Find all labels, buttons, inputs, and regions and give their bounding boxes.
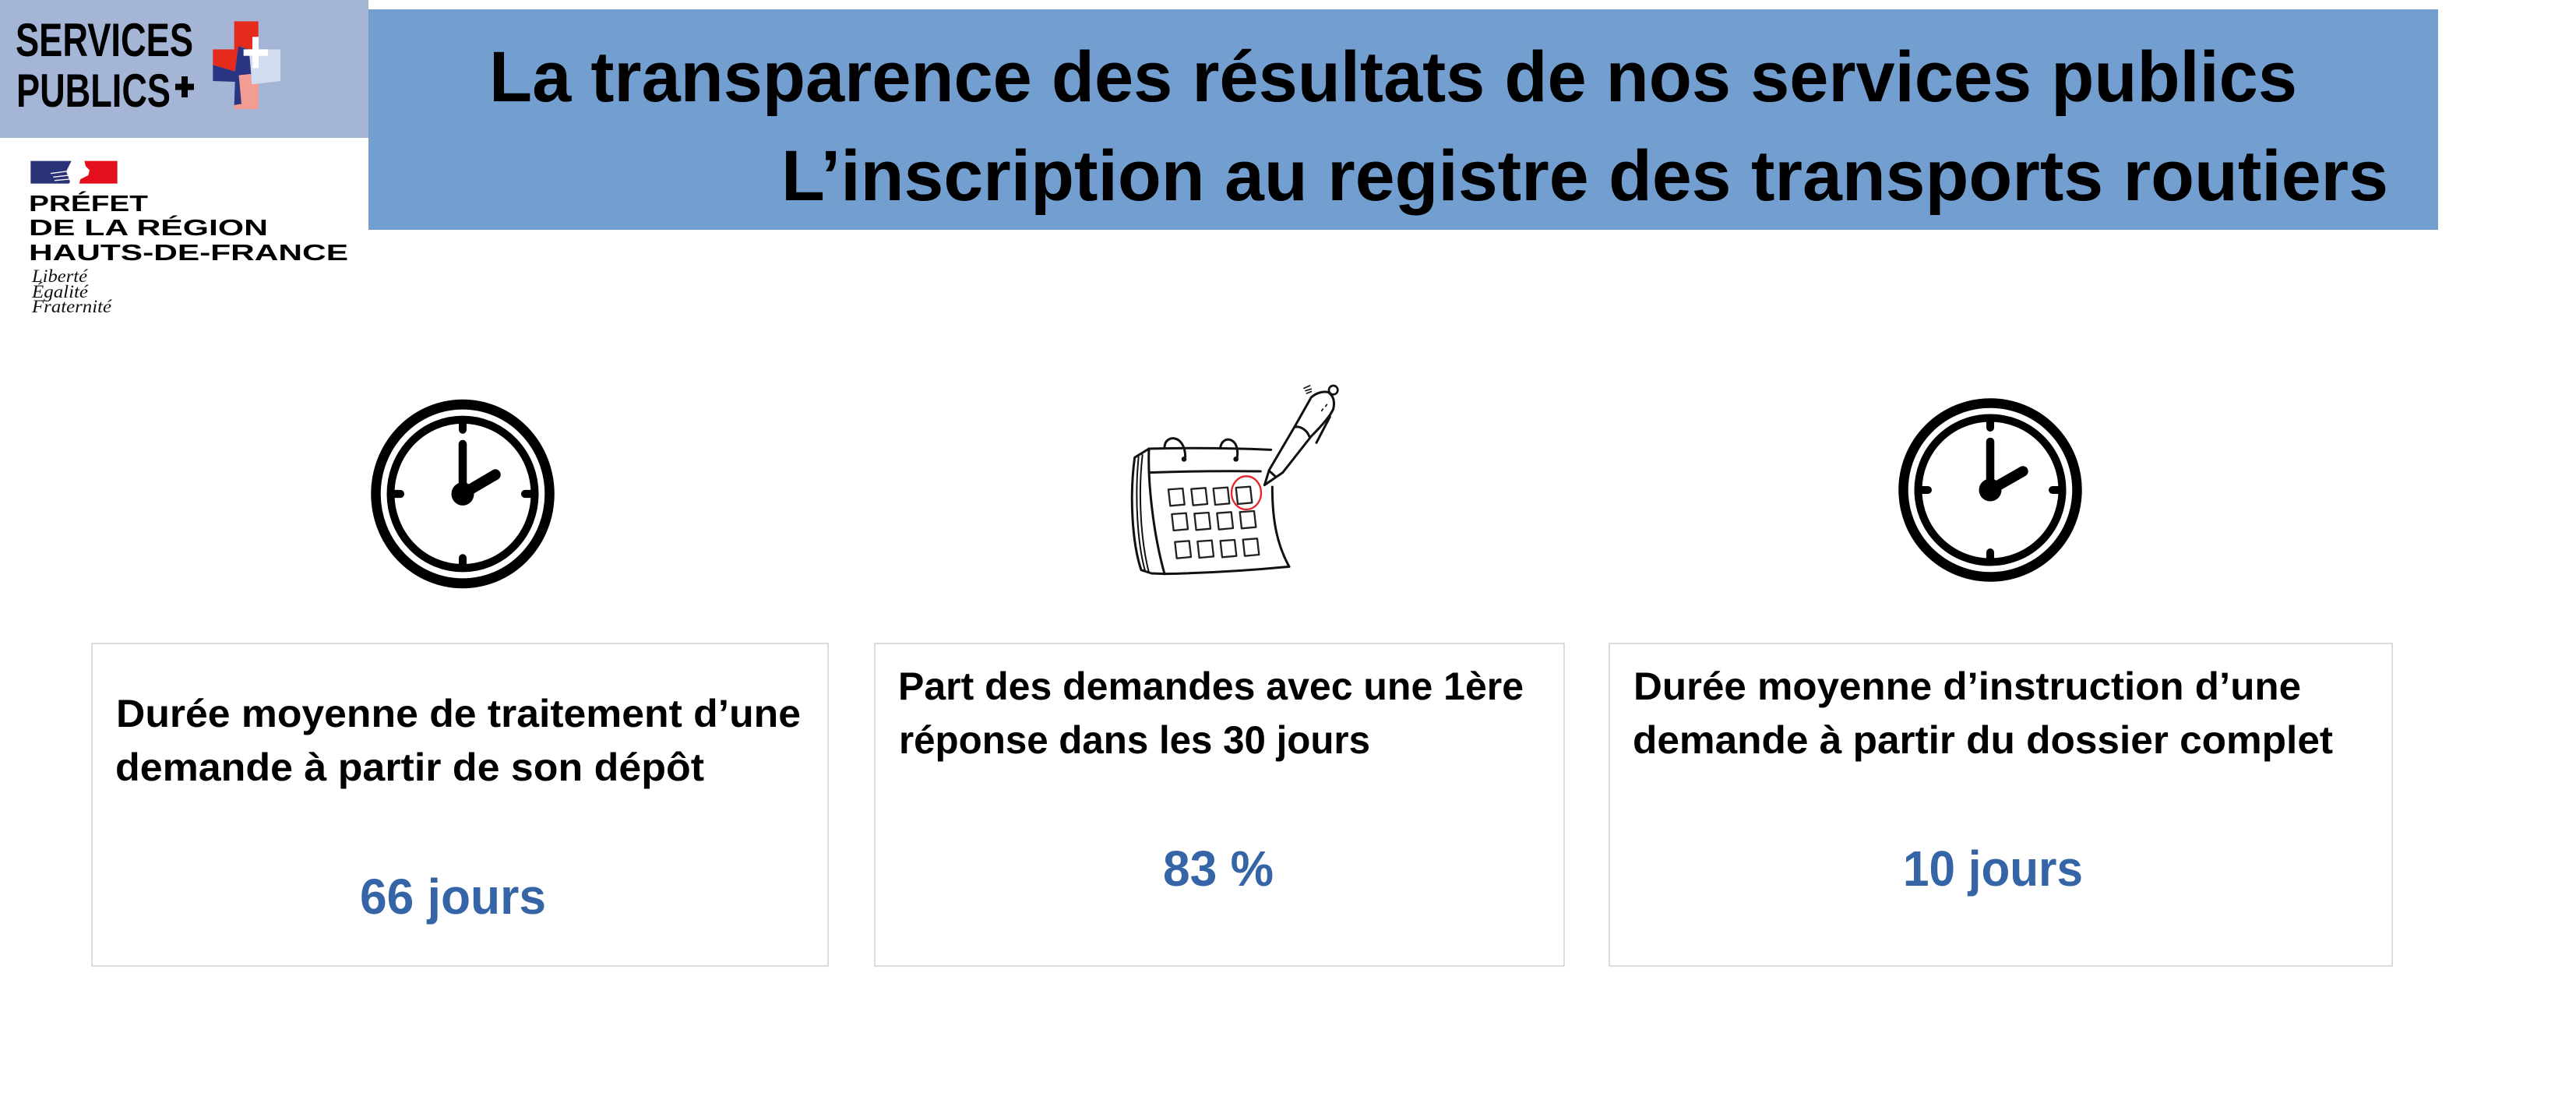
logo: Préfet de la région Hauts-de-France: PRÉFET xyxy=(29,190,148,217)
logo: Préfet de la région Hauts-de-France: HAUTS-DE-FRANCE xyxy=(29,241,348,266)
label: durée d'instruction xyxy=(1633,665,2333,762)
value: 83 %: 83 % xyxy=(1163,841,1274,897)
label: durée de traitement: Durée moyenne de traitement d’une xyxy=(116,692,801,735)
value: 66 jours: 66 jours xyxy=(360,869,546,925)
title banner: L’inscription au registre des transports routiers xyxy=(781,136,2388,216)
logo: Services Publics+ xyxy=(0,0,368,138)
logo: Préfet de la région Hauts-de-France: DE LA RÉGION xyxy=(29,214,268,241)
logo: Préfet de la région Hauts-de-France: Égalité xyxy=(31,282,90,301)
label: première réponse xyxy=(898,665,1524,762)
logo: Préfet de la région Hauts-de-France xyxy=(29,161,348,316)
title banner: La transparence des résultats de nos services publics xyxy=(489,37,2297,117)
icon: clock left xyxy=(375,404,550,583)
logo: Services Publics+: SERVICES xyxy=(16,14,193,66)
label: durée de traitement xyxy=(115,692,801,789)
label: première réponse: Part des demandes avec une 1ère xyxy=(898,665,1524,708)
icon: calendar with pen xyxy=(1132,386,1337,574)
logo: Préfet de la région Hauts-de-France: Fraternité xyxy=(31,297,113,316)
panel: durée de traitement xyxy=(92,643,828,966)
icon: clock right xyxy=(1904,404,2077,576)
label: durée d'instruction: Durée moyenne d’instruction d’une xyxy=(1633,665,2301,708)
label: durée de traitement: demande à partir de son dépôt xyxy=(115,746,704,789)
panel: durée d'instruction xyxy=(1609,643,2392,966)
value: 10 jours: 10 jours xyxy=(1903,841,2083,897)
logo: Services Publics+: PUBLICS xyxy=(16,65,171,117)
label: première réponse: réponse dans les 30 jours xyxy=(899,718,1370,762)
panel: première réponse xyxy=(875,643,1564,966)
logo: Préfet de la région Hauts-de-France: Liberté xyxy=(31,266,89,286)
title banner xyxy=(368,9,2438,230)
label: durée d'instruction: demande à partir du dossier complet xyxy=(1633,718,2333,762)
